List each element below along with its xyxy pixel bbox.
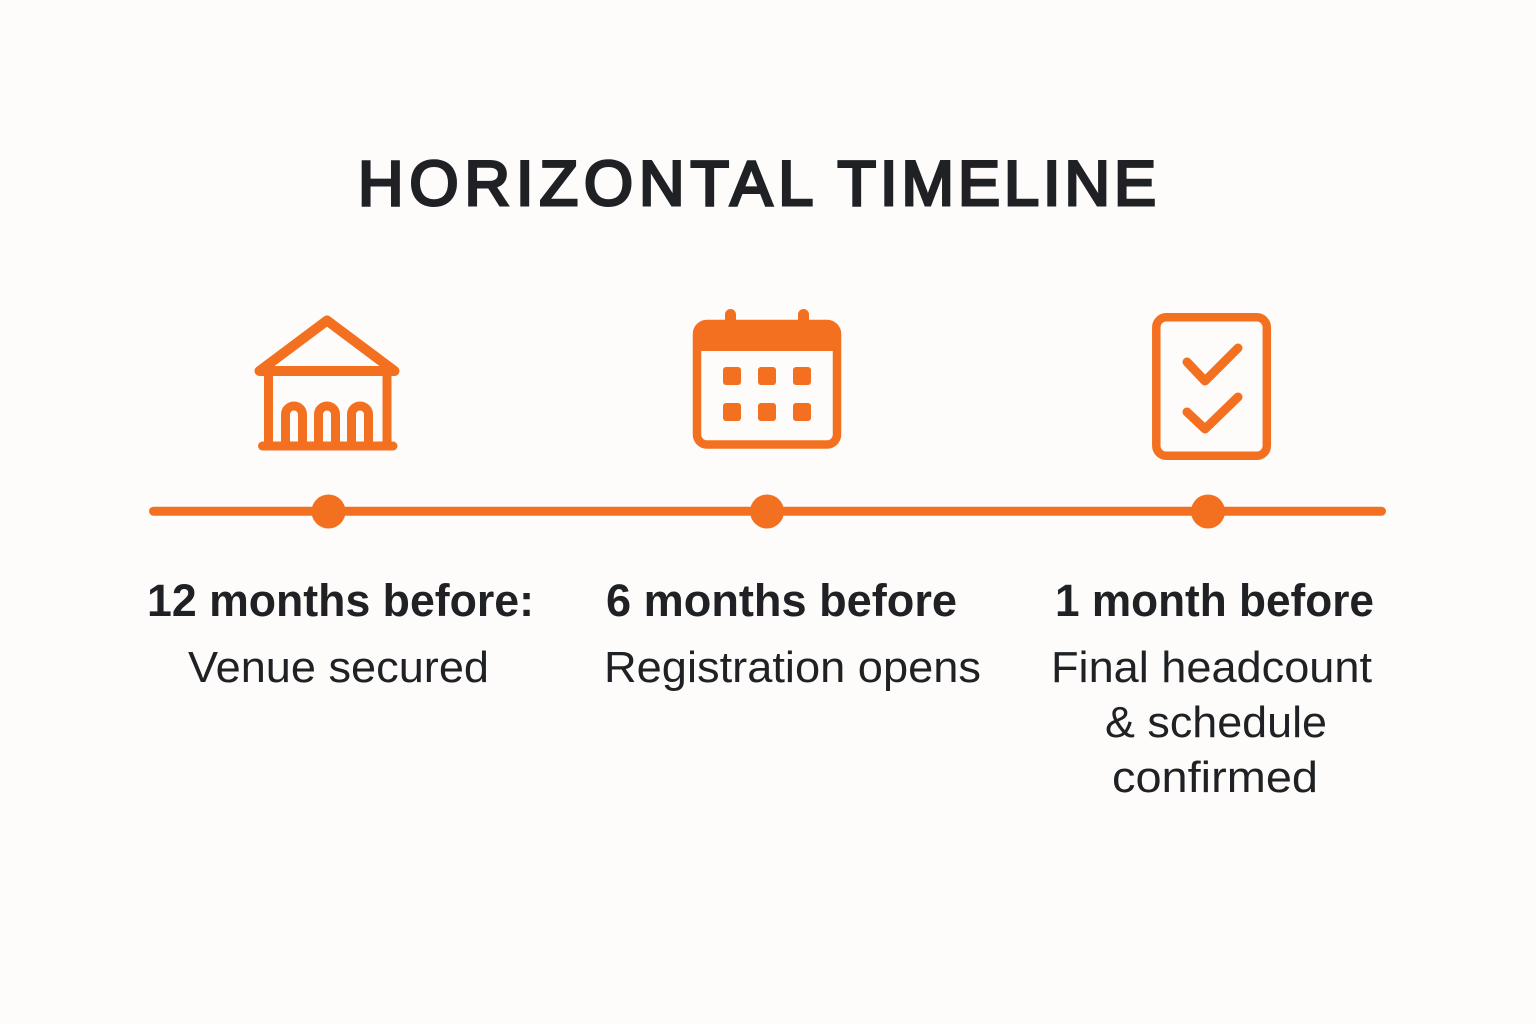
milestone text: 12 months before bbox=[147, 575, 534, 692]
icon: checklist bbox=[1156, 317, 1267, 456]
icon: calendar bbox=[693, 309, 841, 444]
milestone text: 12 months before: Venue secured bbox=[188, 643, 489, 692]
milestone dot: 12 months bbox=[312, 494, 346, 528]
milestone text: 6 months before: 6 months before bbox=[606, 575, 957, 626]
milestone text: 1 month before: & schedule bbox=[1105, 698, 1327, 747]
milestone text: 1 month before bbox=[1051, 575, 1374, 802]
title: TIMELINE bbox=[838, 149, 1156, 219]
icon: venue building bbox=[260, 320, 394, 446]
milestone text: 6 months before bbox=[604, 575, 981, 692]
milestone text: 1 month before: 1 month before bbox=[1055, 575, 1374, 626]
milestone dot: 6 months bbox=[750, 494, 784, 528]
timeline axis bbox=[149, 494, 1386, 528]
title: HORIZONTAL bbox=[358, 149, 811, 219]
milestone text: 1 month before: Final headcount bbox=[1051, 643, 1372, 692]
milestone text: 12 months before: 12 months before: bbox=[147, 575, 534, 626]
milestone text: 6 months before: Registration opens bbox=[604, 643, 981, 692]
milestone dot: 1 month bbox=[1191, 494, 1225, 528]
milestone text: 1 month before: confirmed bbox=[1112, 753, 1318, 802]
